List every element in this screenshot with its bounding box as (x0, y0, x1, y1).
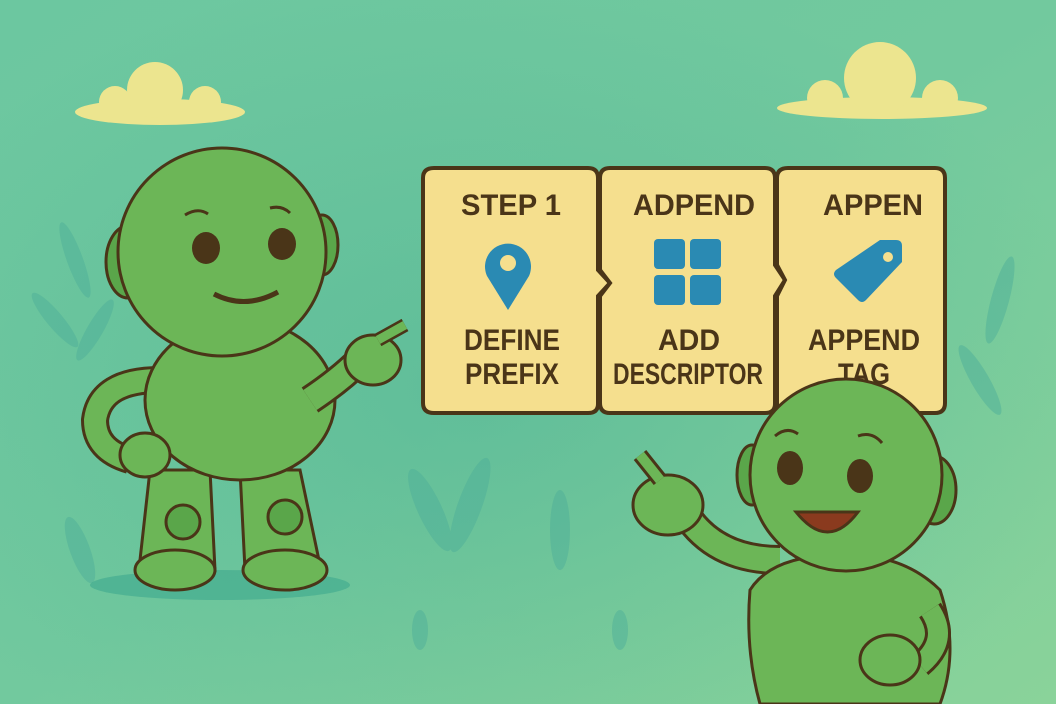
left robot (90, 148, 405, 600)
card 3: TAG (838, 358, 890, 391)
right robot (633, 379, 956, 704)
card 3 (777, 168, 945, 413)
card 1: PREFIX (465, 358, 559, 391)
card 2: DESCRIPTOR (613, 358, 763, 391)
icon: tag (834, 240, 902, 302)
card 2: ADPEND (633, 189, 755, 222)
plants background (26, 220, 1020, 650)
card 1 (423, 168, 610, 413)
cloud left (75, 62, 245, 125)
card 3: APPEND (808, 324, 920, 357)
step cards (423, 168, 945, 413)
cloud right (777, 42, 987, 119)
card 2 (600, 168, 785, 413)
icon: grid (654, 239, 721, 305)
card 3: APPEN (823, 189, 923, 222)
card 2: ADD (658, 324, 720, 357)
card 1: STEP 1 (461, 189, 561, 222)
icon: pin (485, 244, 531, 310)
card 1: DEFINE (464, 324, 560, 357)
